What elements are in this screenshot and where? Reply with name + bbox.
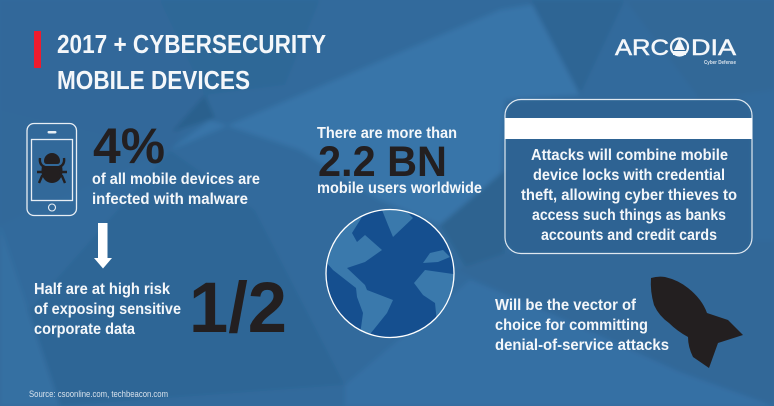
panel: credential theft callout: [505, 100, 752, 254]
title: [57, 29, 326, 95]
callout text: access such things as banks: [532, 207, 726, 224]
stat: 4%: 4%: [93, 118, 165, 174]
stat: 2.2 BN: 2.2 BN: [318, 138, 447, 186]
logo: Arcadia Cyber Defense: ARC: [615, 35, 669, 60]
text: high risk: Half are at high risk: [34, 281, 170, 298]
callout text: theft, allowing cyber thieves to: [521, 187, 737, 204]
text: malware share: of all mobile devices are: [92, 171, 260, 188]
callout text: device locks with credential: [533, 167, 725, 184]
logo: Arcadia Cyber Defense: DIA: [691, 35, 736, 60]
stat: 1/2: 1/2: [189, 269, 287, 348]
text: high risk: [34, 281, 181, 338]
title: MOBILE DEVICES: [57, 65, 250, 95]
logo: Arcadia Cyber Defense: Cyber Defense: [704, 60, 736, 66]
text: high risk: corporate data: [34, 321, 135, 338]
text: denial of service: Will be the vector of: [495, 297, 637, 314]
callout text: [521, 147, 737, 244]
text: malware share: infected with malware: [92, 191, 248, 208]
callout text: Attacks will combine mobile: [531, 147, 728, 164]
icon: rocket: [651, 277, 743, 368]
text: malware share: [92, 171, 260, 208]
white band: [505, 118, 752, 139]
text: denial of service: [495, 297, 669, 354]
logo: Arcadia Cyber Defense: [615, 35, 736, 66]
text: denial of service: denial-of-service attacks: [495, 337, 669, 354]
callout text: accounts and credit cards: [541, 227, 717, 244]
text: high risk: of exposing sensitive: [34, 301, 181, 318]
arrow: down: [94, 223, 112, 268]
icon: globe: [325, 208, 455, 338]
icon: bug: [37, 153, 67, 183]
text: mobile users intro: There are more than: [317, 125, 457, 142]
source: Source: csoonline.com, techbeacon.com: [29, 389, 168, 400]
icon: smartphone with malware bug: [27, 124, 76, 216]
title: 2017 + CYBERSECURITY: [57, 29, 326, 59]
text: mobile users worldwide: mobile users worldwide: [317, 180, 482, 197]
accent bar: [34, 31, 41, 68]
background: faceted blue polygons: [174, 2, 751, 267]
text: denial of service: choice for committing: [495, 317, 648, 334]
